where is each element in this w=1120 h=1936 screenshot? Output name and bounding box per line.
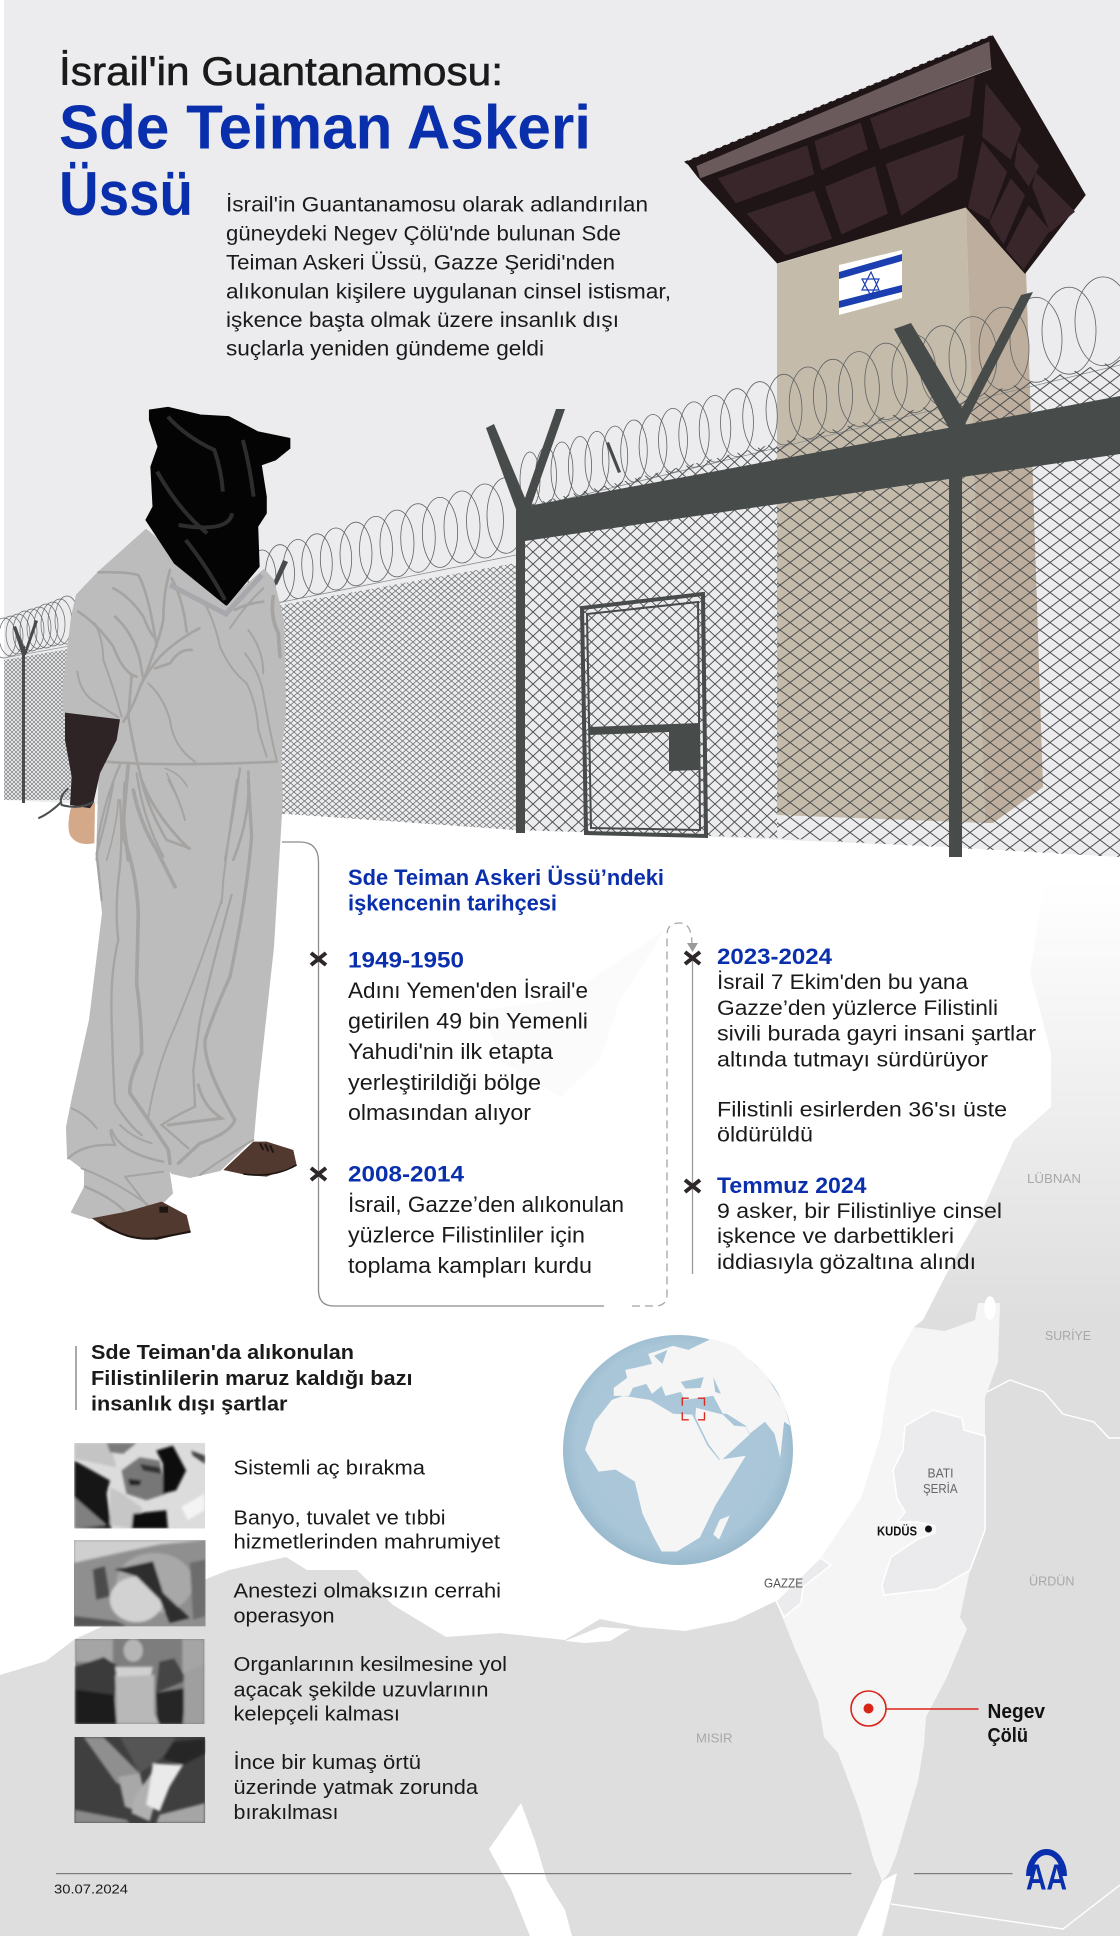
- footer rule: [56, 1873, 1012, 1874]
- timeline: 1949-1950: Adını Yemen'den İsrail'e: [348, 978, 588, 1003]
- timeline heading: Sde Teiman Askeri Üssü’ndeki: [348, 865, 664, 890]
- intro paragraph: [226, 192, 671, 360]
- lower folds: [68, 780, 253, 1213]
- timeline heading: [348, 865, 664, 916]
- timeline markers: [311, 952, 700, 1192]
- map labels: [696, 1171, 1091, 1746]
- arabia: [695, 1408, 750, 1461]
- title: main heading: Üssü: [59, 160, 193, 229]
- timeline: 2023-2024: öldürüldü: [717, 1122, 813, 1146]
- conditions list: operasyon: [234, 1606, 334, 1628]
- hood: [146, 407, 289, 605]
- conditions list: Banyo, tuvalet ve tıbbi: [234, 1508, 446, 1530]
- arm and hand: [38, 713, 120, 844]
- prisoner figure: [38, 407, 297, 1240]
- collar: [170, 575, 262, 614]
- fence beam and posts: [13, 292, 1120, 857]
- locator bracket: [682, 1398, 704, 1420]
- conditions list: [234, 1458, 507, 1824]
- map: base land: [0, 860, 1120, 1936]
- madagascar: [713, 1516, 730, 1540]
- timeline connector lines: [282, 842, 698, 1306]
- timeline: Temmuz 2024: iddiasıyla gözaltına alındı: [717, 1250, 976, 1274]
- timeline: 2023-2024: altında tutmayı sürdürüyor: [717, 1048, 988, 1072]
- upper folds: [77, 570, 280, 860]
- conditions list: bırakılması: [234, 1802, 338, 1824]
- negev marker: Negev: [988, 1701, 1046, 1723]
- map: faint island: [483, 930, 665, 1097]
- timeline: 1949-1950: olmasından alıyor: [348, 1100, 531, 1125]
- timeline: 2008-2014: 2008-2014: [348, 1162, 465, 1186]
- map: sinai lagoon and gulfs: [489, 1627, 897, 1936]
- map labels: ÜRDÜN: [1029, 1574, 1074, 1588]
- jumpsuit: [63, 530, 285, 1218]
- title: main heading: Sde Teiman Askeri: [59, 94, 591, 162]
- map labels: MISIR: [696, 1730, 732, 1746]
- logo: AA: [1026, 1856, 1067, 1898]
- conditions heading: Sde Teiman'da alıkonulan: [91, 1341, 354, 1364]
- timeline: 1949-1950: Yahudi'nin ilk etapta: [348, 1039, 554, 1064]
- title: first line: İsrail'in Guantanamosu:: [59, 49, 503, 94]
- map: borders: [891, 1297, 1120, 1929]
- map labels: GAZZE: [764, 1576, 803, 1590]
- map labels: BATI: [928, 1466, 954, 1480]
- timeline: 2008-2014: yüzlerce Filistinliler için: [348, 1222, 585, 1248]
- date: 30.07.2024: [54, 1882, 128, 1896]
- intro paragraph: alıkonulan kişilere uygulanan cinsel istismar,: [226, 280, 671, 304]
- timeline: 2023-2024: 2023-2024: [717, 944, 833, 969]
- timeline: 2023-2024: [717, 944, 1036, 1146]
- map: west bank: [882, 1410, 985, 1595]
- timeline: 2023-2024: İsrail 7 Ekim'den bu yana: [717, 970, 968, 994]
- conditions heading: Filistinlilerin maruz kaldığı bazı: [91, 1367, 412, 1390]
- title: main heading: [59, 94, 591, 229]
- timeline: 1949-1950: getirilen 49 bin Yemenli: [348, 1008, 588, 1034]
- jerusalem marker: KUDÜS: [877, 1524, 917, 1538]
- conditions list: Organlarının kesilmesine yol: [234, 1654, 507, 1676]
- chain-link fence mesh: [4, 360, 1120, 857]
- timeline: Temmuz 2024: [717, 1173, 1002, 1274]
- conditions list: hizmetlerinden mahrumiyet: [234, 1532, 500, 1554]
- intro paragraph: Teiman Askeri Üssü, Gazze Şeridi'nden: [226, 250, 615, 274]
- timeline: 1949-1950: 1949-1950: [348, 948, 464, 972]
- conditions list: kelepçeli kalması: [234, 1704, 400, 1726]
- photo: detainee lying on a bed: [74, 1443, 206, 1528]
- timeline heading: işkencenin tarihçesi: [348, 890, 557, 916]
- eurasia: [614, 1339, 790, 1458]
- map labels: LÜBNAN: [1027, 1171, 1081, 1186]
- timeline: 1949-1950: yerleştirildiği bölge: [348, 1070, 541, 1095]
- watchtower: [686, 35, 1086, 823]
- timeline: Temmuz 2024: 9 asker, bir Filistinliye cinsel: [717, 1199, 1002, 1223]
- flag: [839, 250, 902, 315]
- timeline: 2023-2024: sivili burada gayri insani şartlar: [717, 1022, 1036, 1046]
- timeline: Temmuz 2024: Temmuz 2024: [717, 1173, 867, 1198]
- photo: emaciated torso: [74, 1639, 206, 1724]
- conditions heading: [75, 1341, 412, 1416]
- tower walls: [777, 207, 985, 823]
- fence gate: [582, 594, 706, 836]
- photo: abdominal wound: [74, 1540, 206, 1626]
- shoes: [92, 1142, 297, 1240]
- conditions heading: insanlık dışı şartlar: [91, 1392, 288, 1416]
- negev marker: [851, 1691, 1046, 1747]
- negev marker: Çölü: [988, 1725, 1028, 1747]
- razor wire: middle section: [248, 478, 525, 606]
- intro paragraph: güneydeki Negev Çölü'nde bulunan Sde: [226, 222, 621, 246]
- intro paragraph: işkence başta olmak üzere insanlık dışı: [226, 308, 619, 332]
- razor wire: right section: [520, 277, 1120, 510]
- map labels: SURİYE: [1045, 1328, 1091, 1343]
- timeline: 2008-2014: İsrail, Gazze’den alıkonulan: [348, 1192, 624, 1217]
- conditions list: Sistemli aç bırakma: [234, 1458, 426, 1480]
- timeline: 2008-2014: [348, 1162, 624, 1278]
- timeline: 2008-2014: toplama kampları kurdu: [348, 1253, 592, 1278]
- conditions list: Anestezi olmaksızın cerrahi: [234, 1580, 501, 1602]
- map: israel territory: [776, 1303, 1000, 1881]
- timeline: Temmuz 2024: işkence ve darbettikleri: [717, 1224, 954, 1248]
- map: gaza strip: [776, 1558, 831, 1617]
- conditions list: üzerinde yatmak zorunda: [234, 1777, 479, 1799]
- timeline: 2023-2024: Filistinli esirlerden 36'sı üste: [717, 1098, 1007, 1122]
- conditions list: İnce bir kumaş örtü: [234, 1751, 421, 1774]
- roof: [686, 35, 1086, 274]
- razor wire: far left: [0, 596, 79, 658]
- inland seas: [681, 1377, 704, 1389]
- map labels: ŞERİA: [923, 1481, 958, 1496]
- intro paragraph: İsrail'in Guantanamosu olarak adlandırılan: [226, 192, 648, 216]
- locator globe: [563, 1335, 793, 1565]
- conditions list: açacak şekilde uzuvlarının: [234, 1680, 488, 1702]
- photo: bandaged hands: [74, 1737, 206, 1823]
- timeline: 2023-2024: Gazze’den yüzlerce Filistinli: [717, 996, 998, 1020]
- timeline: 1949-1950: [348, 948, 588, 1125]
- intro paragraph: suçlarla yeniden gündeme geldi: [226, 336, 544, 360]
- africa: [585, 1396, 746, 1552]
